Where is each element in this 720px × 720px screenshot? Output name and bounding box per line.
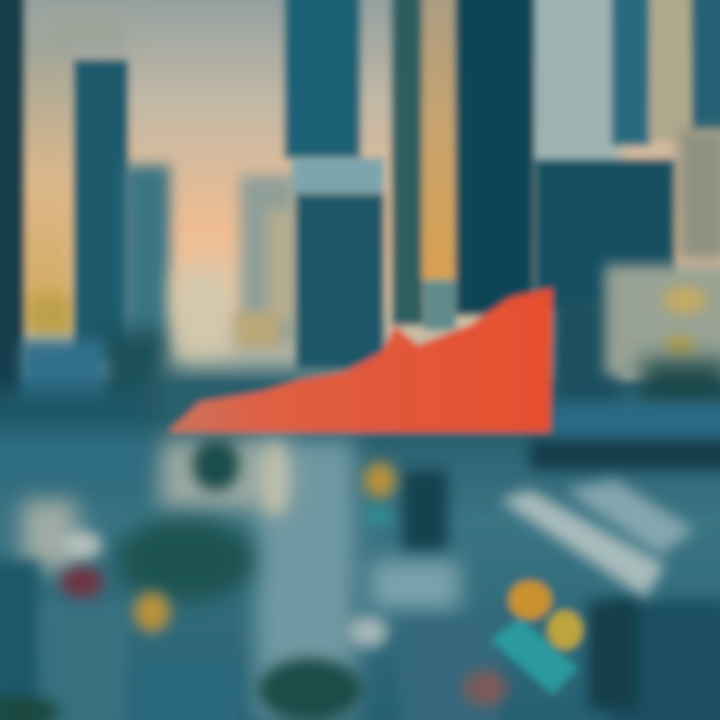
street and lower city [0,340,720,720]
skyline: centre towers [175,0,534,369]
street details: cars and signs [60,444,583,706]
skyline: right towers [535,0,720,415]
skyline: left towers [0,0,170,430]
red rising area chart [168,288,552,432]
trees [0,439,362,720]
